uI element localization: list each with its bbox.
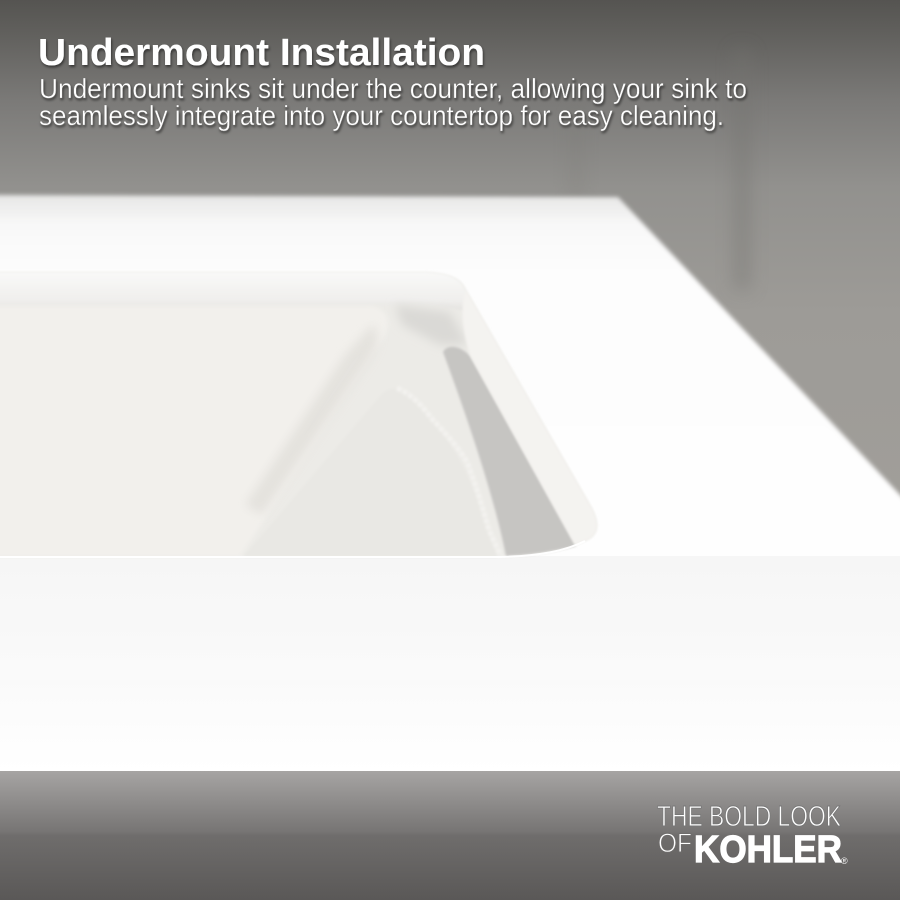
soft shadow of basin wall (245, 325, 378, 515)
sink opening (0, 272, 597, 557)
grey shadow on inner wall (443, 347, 576, 556)
description text (39, 73, 747, 131)
description text: Undermount sinks sit under the counter, allowing your sink to (39, 73, 747, 104)
logo: The Bold Look of Kohler: KOHLER (694, 829, 842, 871)
scalloped reflection edge (397, 388, 501, 556)
white countertop (0, 195, 900, 790)
footer band (0, 771, 900, 900)
front counter edge (0, 541, 585, 557)
upper rim shading (0, 272, 472, 312)
logo: The Bold Look of Kohler: THE BOLD LOOK (657, 801, 842, 833)
bright inner rim (463, 290, 597, 545)
basin floor (243, 389, 497, 557)
far basin wall (0, 306, 388, 557)
logo: The Bold Look of Kohler: OF (658, 828, 692, 858)
description text: seamlessly integrate into your countertop for easy cleaning. (39, 100, 724, 131)
logo: The Bold Look of Kohler (657, 801, 848, 871)
sink basin (0, 272, 597, 557)
title: Undermount Installation (38, 32, 485, 74)
logo: The Bold Look of Kohler: ® (841, 856, 848, 866)
back corner shade (395, 305, 468, 345)
